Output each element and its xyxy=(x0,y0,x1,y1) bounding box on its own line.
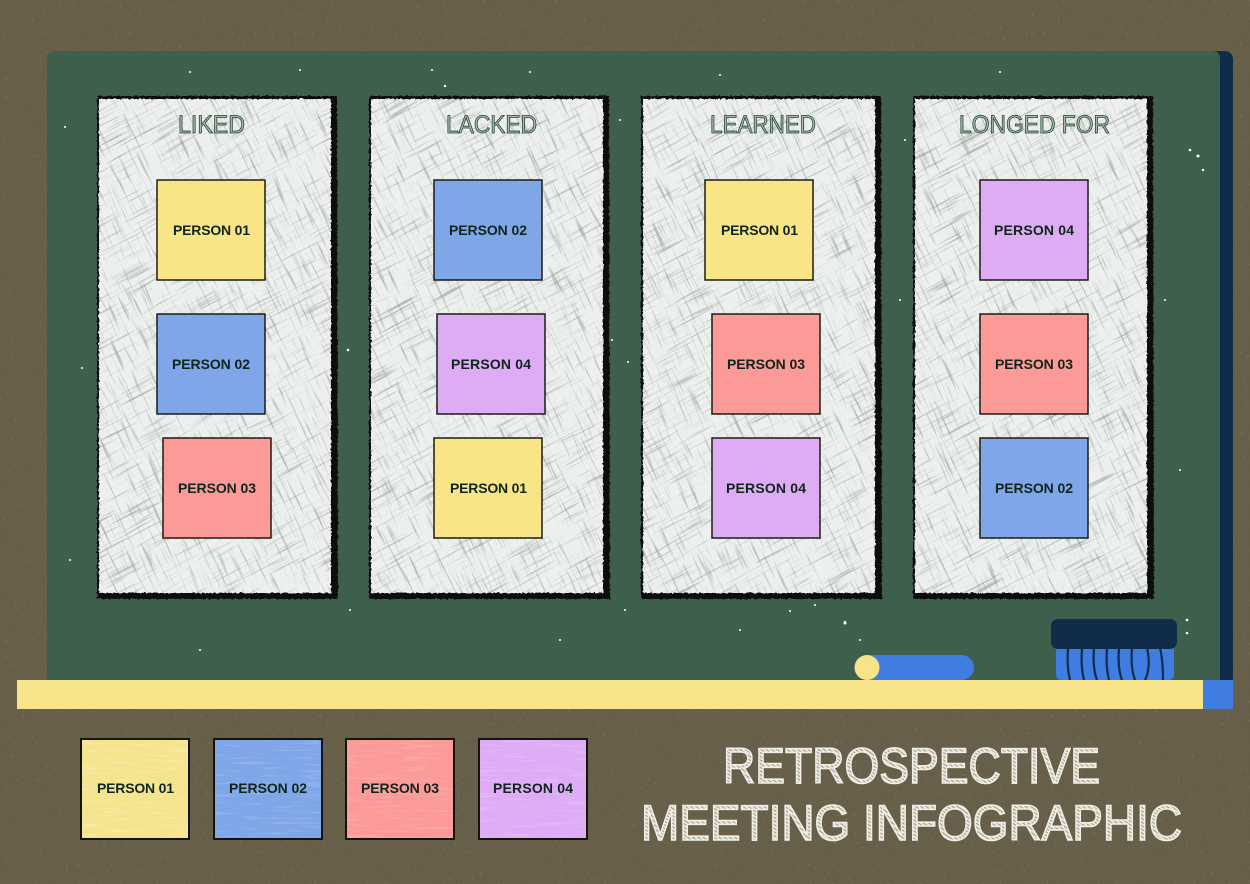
note: person 02 xyxy=(980,438,1088,538)
panel: learned xyxy=(640,95,882,600)
note: person 02 xyxy=(434,180,542,280)
legend: person 04: PERSON 04 xyxy=(493,780,573,796)
chalkboard xyxy=(47,51,1233,691)
note: person 01 xyxy=(157,180,265,280)
note: person 01 xyxy=(434,438,542,538)
chalk ledge xyxy=(17,680,1233,709)
note: person 03 xyxy=(163,438,271,538)
note: person 04 xyxy=(712,438,820,538)
legend: person 01 xyxy=(81,739,189,839)
legend: person 01: PERSON 01 xyxy=(97,780,174,796)
note: person 03: PERSON 03 xyxy=(178,480,256,496)
note: person 04 xyxy=(980,180,1088,280)
legend: person 02: PERSON 02 xyxy=(229,780,307,796)
note: person 02 xyxy=(157,314,265,414)
sticky notes: liked xyxy=(157,180,271,538)
note: person 03: PERSON 03 xyxy=(727,356,805,372)
legend: person 03 xyxy=(346,739,454,839)
heading: liked: LIKED xyxy=(178,111,245,139)
note: person 01: PERSON 01 xyxy=(450,480,527,496)
note: person 01: PERSON 01 xyxy=(721,222,798,238)
panel: longed for xyxy=(912,95,1155,600)
panel: lacked xyxy=(368,95,611,600)
legend: person 02 xyxy=(214,739,322,839)
legend xyxy=(81,739,587,839)
sticky notes: longed for xyxy=(980,180,1088,538)
note: person 02: PERSON 02 xyxy=(995,480,1073,496)
legend: person 03: PERSON 03 xyxy=(361,780,439,796)
note: person 02: PERSON 02 xyxy=(172,356,250,372)
note: person 02: PERSON 02 xyxy=(449,222,527,238)
heading: lacked: LACKED xyxy=(446,111,537,139)
title: MEETING INFOGRAPHIC xyxy=(641,795,1182,851)
note: person 04: PERSON 04 xyxy=(726,480,806,496)
sticky notes: lacked xyxy=(434,180,545,538)
note: person 01: PERSON 01 xyxy=(173,222,250,238)
legend: person 04 xyxy=(479,739,587,839)
icon: chalk xyxy=(854,655,974,680)
panel: liked xyxy=(96,95,339,600)
sticky notes: learned xyxy=(705,180,820,538)
note: person 04: PERSON 04 xyxy=(451,356,531,372)
note: person 04 xyxy=(437,314,545,414)
heading: longed for: LONGED FOR xyxy=(959,111,1110,139)
icon: eraser xyxy=(1051,619,1177,680)
note: person 03 xyxy=(980,314,1088,414)
note: person 04: PERSON 04 xyxy=(994,222,1074,238)
title xyxy=(641,738,1182,851)
note: person 01 xyxy=(705,180,813,280)
heading: learned: LEARNED xyxy=(710,111,816,139)
note: person 03 xyxy=(712,314,820,414)
title: RETROSPECTIVE xyxy=(723,738,1100,794)
note: person 03: PERSON 03 xyxy=(995,356,1073,372)
